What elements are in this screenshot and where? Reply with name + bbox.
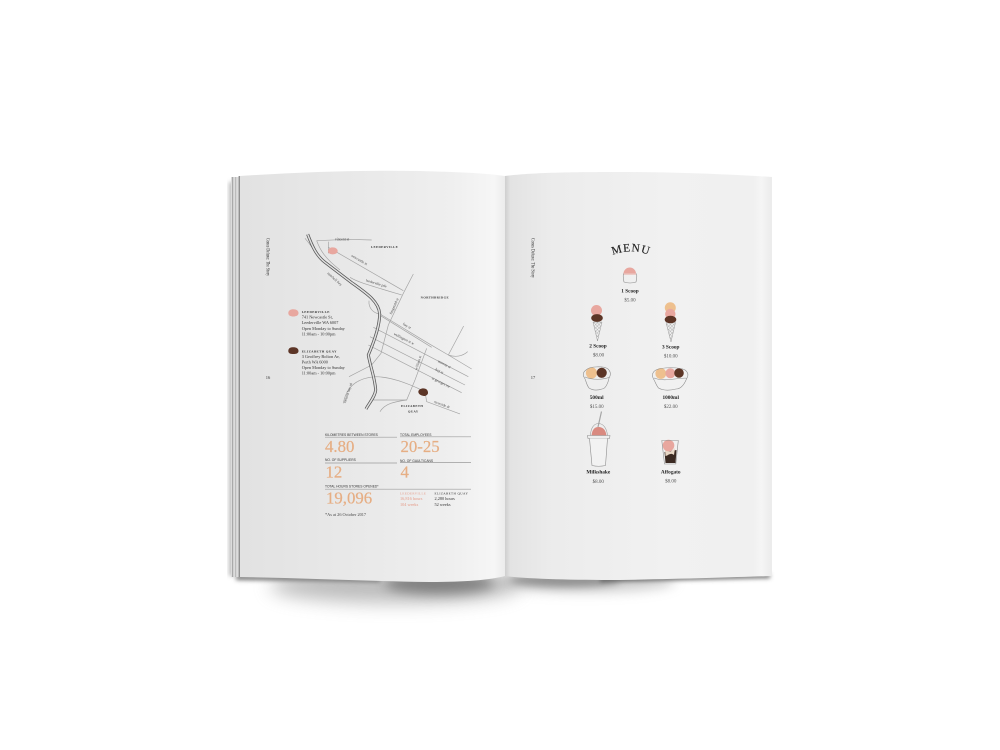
suburb labels: NORTHBRIDGE xyxy=(421,296,449,300)
suburb labels xyxy=(371,245,449,414)
map xyxy=(305,234,472,414)
street labels xyxy=(326,237,451,410)
footnote: *As at 26 October 2017 xyxy=(325,512,367,517)
label: Affogato xyxy=(661,470,681,476)
address text: 11:00am - 10:00pm xyxy=(302,370,336,376)
hours breakdown: Leederville xyxy=(400,492,426,507)
drop shadow under the spread xyxy=(229,182,770,603)
icon xyxy=(655,368,666,379)
icon xyxy=(598,412,602,427)
stat labels: TOTAL EMPLOYEES xyxy=(400,433,432,437)
menu item: 1 scoop xyxy=(621,267,639,304)
running head: left page: Cones Deluxe: The Story xyxy=(264,238,270,276)
hours breakdown: Elizabeth Quay: 2,280 hours xyxy=(434,496,455,502)
hours breakdown: Leederville: 16,816 hours xyxy=(400,496,423,502)
stat values: 12 xyxy=(326,462,342,482)
stat values: 4.80 xyxy=(325,437,354,456)
hours breakdown: Elizabeth Quay: ELIZABETH QUAY xyxy=(434,492,468,496)
menu title: MENU xyxy=(610,244,650,255)
map marker: Leederville xyxy=(328,247,338,254)
address text: Perth WA 6000 xyxy=(302,360,328,364)
stat labels: NO. OF GAULTICANS xyxy=(400,459,434,463)
stat labels xyxy=(325,433,434,488)
hours breakdown: Elizabeth Quay: 52 weeks xyxy=(434,502,451,507)
price: $8.00 xyxy=(593,354,605,358)
icon xyxy=(624,267,636,275)
stat values: 4 xyxy=(400,462,410,482)
menu item: affogato xyxy=(661,440,681,484)
street labels: leederville pde xyxy=(365,278,388,289)
icon xyxy=(593,322,602,341)
street labels: william st xyxy=(414,355,422,370)
scoop icon xyxy=(288,309,298,316)
address text: Open Monday to Sunday xyxy=(302,326,346,331)
street labels: wellington st w xyxy=(393,332,415,346)
street labels: fitzgerald st xyxy=(389,298,400,315)
street labels: mounts bay rd xyxy=(343,382,353,404)
address text: 741 Newcastle St, xyxy=(302,314,333,320)
suburb labels: ELIZABETH xyxy=(401,404,423,408)
street labels: riverside dr xyxy=(433,400,451,410)
address text xyxy=(302,310,346,336)
stat values xyxy=(325,437,440,508)
label: 2 Scoop xyxy=(589,344,607,350)
page number: left page: 16 xyxy=(266,375,271,380)
label: 500ml xyxy=(590,395,604,401)
address text: 11:00am - 10:00pm xyxy=(302,332,336,336)
address text: Open Monday to Sunday xyxy=(302,365,346,370)
price: $15.00 xyxy=(590,405,604,410)
stat labels: NO. OF SUPPLIERS xyxy=(325,458,357,462)
stat labels: KILOMETRES BETWEEN STORES xyxy=(325,433,379,437)
suburb labels: QUAY xyxy=(408,410,419,414)
price: $10.00 xyxy=(664,354,678,360)
stat values: 20-25 xyxy=(400,437,440,456)
stat labels: TOTAL HOURS STORES OPENED* xyxy=(325,484,379,488)
page stack edge xyxy=(231,176,241,577)
street labels: mitchell fwy xyxy=(326,271,343,287)
hours breakdown: Leederville: 104 weeks xyxy=(400,502,419,507)
icon xyxy=(666,322,676,342)
label: 1 Scoop xyxy=(621,288,639,294)
menu item: 2 scoop xyxy=(589,305,607,358)
street labels: vincent st xyxy=(335,237,349,241)
address text xyxy=(302,350,346,376)
menu item: milkshake xyxy=(586,412,611,485)
label: 3 Scoop xyxy=(662,344,680,350)
price: $8.00 xyxy=(593,480,604,485)
right page xyxy=(505,172,772,580)
hours breakdown: Elizabeth Quay xyxy=(434,492,468,507)
label: Milkshake xyxy=(586,470,611,476)
map marker: Elizabeth Quay xyxy=(418,388,428,396)
stat values: 19,096 xyxy=(326,488,372,508)
street network xyxy=(305,238,472,414)
street labels: murray st xyxy=(437,359,451,369)
price: $5.00 xyxy=(624,298,636,304)
menu item: 1000ml xyxy=(652,368,688,410)
left page xyxy=(240,171,505,582)
store details: Leederville xyxy=(288,309,346,336)
label: 1000ml xyxy=(662,395,679,401)
icon xyxy=(586,367,597,379)
running head: right page: Cones Deluxe: The Story xyxy=(530,238,534,278)
address text: Leederville WA 6007 xyxy=(302,320,339,325)
icon xyxy=(664,450,676,463)
street labels: hay st xyxy=(402,322,412,330)
statistics panel xyxy=(325,433,471,517)
street labels: hay st xyxy=(435,367,444,375)
price: $22.00 xyxy=(664,405,678,410)
hours breakdown: Leederville: LEEDERVILLE xyxy=(400,492,426,496)
menu item: 3 scoop xyxy=(662,302,680,360)
freeway xyxy=(308,234,380,409)
street labels: newcastle st xyxy=(350,254,368,266)
address text: 3 Geoffrey Bolton Av, xyxy=(302,354,340,360)
address text: ELIZABETH QUAY xyxy=(302,350,337,354)
address text: LEEDERVILLE xyxy=(302,310,330,314)
suburb labels: LEEDERVILLE xyxy=(371,245,398,249)
menu item: 500ml xyxy=(583,367,610,410)
price: $8.00 xyxy=(665,480,677,484)
street labels: st georges tce xyxy=(431,376,451,389)
page number: right page: 17 xyxy=(531,375,536,380)
store details: Elizabeth Quay xyxy=(288,347,346,376)
scoop icon xyxy=(288,347,298,354)
